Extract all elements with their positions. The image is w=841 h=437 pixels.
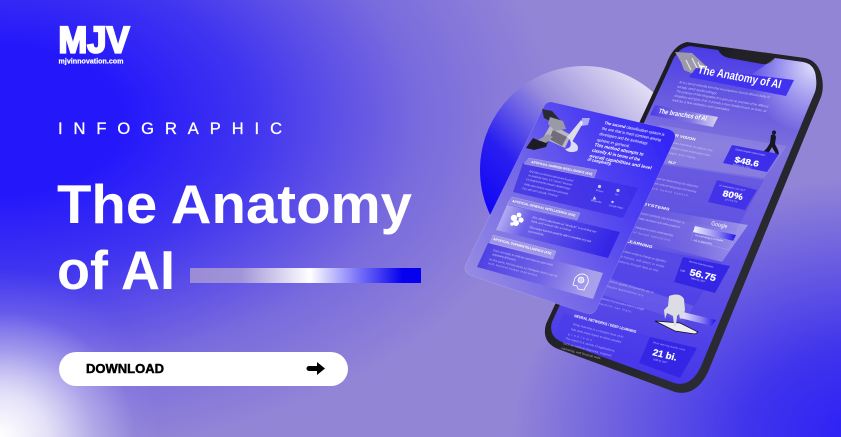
logo: MJV: mjvinnovation.com: [58, 58, 124, 66]
card background: [465, 102, 675, 314]
panel: artificial narrow intelligence: ANI refers to AI that is trained and focused: [529, 169, 574, 183]
section panel: deep learning: [582, 272, 694, 322]
card intro text: the one that is most common among: [601, 126, 663, 142]
heading: the branches of AI: The branches of AI: [657, 108, 708, 123]
panel: artificial narrow intelligence: on particular tasks, it is "narrow" because: [528, 173, 573, 187]
panel: artificial superintelligence: surpassing all humans.: [492, 252, 517, 262]
stat box: 80%: of companies use NLP: [719, 184, 746, 192]
card intro text: classify AI in terms of the: [591, 148, 642, 162]
stat box: 56.75: US$: [680, 269, 686, 273]
panel: artificial general intelligence: AGI, which is also known as "strong AI", is an AI that can: [532, 215, 597, 234]
panel: artificial superintelligence: Does not begin to replicate and improve upon itself,: [493, 248, 554, 267]
heading: The Anatomy of AI: of AI: [57, 239, 175, 301]
section panel: neural networks: Deep learning is a complex form of AI: [573, 322, 624, 339]
button: download: DOWNLOAD: [86, 362, 164, 376]
icons: ANI examples: Wikipedia: [591, 199, 602, 204]
glass card: [465, 102, 675, 314]
section panel: expert systems: of human specialists.: [633, 230, 672, 242]
card intro text: The second classification system is: [604, 120, 666, 137]
panel: artificial general intelligence: ARTIFICIAL GENERAL INTELLIGENCE (AGI): [512, 199, 576, 217]
google example card: ML in technology & in industries: [695, 233, 725, 243]
section panel: computer vision: images and videos.: [666, 150, 697, 160]
section panel: expert systems: expert systems use knowledge to: [640, 211, 685, 225]
heading: The Anatomy of AI: [57, 173, 412, 301]
stat box: 56.75: 56.75: [688, 267, 717, 283]
section panel: neural networks: that uses many layers to solve complex: [571, 327, 622, 344]
section panel: computer vision: interpret visual information from: [668, 145, 712, 157]
section panel: deep learning: computer applications in a: [603, 283, 644, 297]
stat box: 80%: [708, 180, 757, 210]
panel: artificial general intelligence: think and reason like a human: [531, 219, 572, 232]
panel: artificial superintelligence: ARTIFICIAL SUPERINTELLIGENCE (ASI): [493, 237, 552, 255]
panel: artificial superintelligence: with minimal human instruction.: [488, 261, 539, 278]
section panel: neural networks: marketing, and financial tools.: [561, 346, 602, 360]
logo: MJV: MJV: [58, 20, 130, 60]
heading: The Anatomy of AI: The Anatomy: [57, 173, 412, 235]
section panel: neural networks: NEURAL NETWORKS / DEEP LEARNING: [574, 313, 637, 334]
phone intro text: disciplines and types of AI, to provide a more detailed lesson on terms, as: [674, 94, 767, 113]
card intro text: overall capabilities and level: [589, 153, 653, 170]
phone intro text: [672, 80, 770, 113]
section panel: machine learning: to improve, with speed, or simple: [620, 254, 665, 269]
phone screen: [551, 46, 816, 384]
icons: ANI examples: Google Maps: [609, 204, 624, 210]
google example card: ML in diagnostics: [694, 238, 714, 246]
phone intro text: The purpose of this infographic is to give you an overview of the different: [676, 89, 769, 109]
section panel: deep learning: machines capable of beyond the use of: [605, 278, 654, 294]
icons: ANI examples: [591, 185, 624, 210]
section panel: deep learning: process of processes where a single: [600, 296, 645, 311]
section panel: natural language: NLP: [668, 160, 677, 165]
phone intro text: well as a few statistics and examples.: [672, 98, 731, 112]
stat box: 56.75: Machine learning market: [689, 260, 714, 269]
gradient bar: [190, 268, 421, 283]
stat box: $48.6: Global computer vision market: [735, 148, 766, 157]
card intro text: developers and the technology: [599, 131, 650, 146]
section panel: machine learning: LEARNING: [626, 239, 653, 249]
eyebrow: INFOGRAPHIC: INFOGRAPHIC: [58, 120, 282, 138]
panel: artificial narrow intelligence: ARTIFICIAL NARROW INTELLIGENCE (ANI): [531, 160, 593, 176]
panel: artificial superintelligence: At this point, ASI becomes so intelligent that it can do: [489, 257, 558, 278]
card intro text: [587, 120, 666, 170]
panel: artificial general intelligence: This means that AGI would be able to complete any task: [529, 225, 592, 243]
stat box: 21 bi: 21 bi.: [651, 347, 678, 363]
section panel: natural language: and human speech.: [651, 186, 690, 198]
section panel: natural language: with natural language processing: [653, 181, 697, 194]
stat box: 56.75: billion by 2027: [691, 277, 706, 283]
phone title: The Anatomy of AI: [696, 62, 783, 91]
panel: artificial general intelligence: successfully.: [528, 229, 545, 237]
section panel: neural networks: [554, 313, 700, 382]
section panel: natural language: used for determining the diagnosis: [655, 176, 700, 189]
section panel: machine learning: [586, 239, 722, 306]
phone mockup: [545, 42, 823, 393]
stat box: 80%: 80%: [721, 188, 745, 202]
section panel: computer vision: COMPUTER VISION: [652, 129, 696, 142]
panel: artificial narrow intelligence: they still can't actually "thinking": [522, 186, 559, 198]
decorative circle: [480, 66, 688, 274]
phone intro text: study and technology.: [677, 85, 718, 95]
icon: walking figure: [763, 130, 779, 154]
stat box: 21 bi: Deep learning market value: [653, 341, 686, 352]
section panel: computer vision: [640, 125, 787, 178]
card intro text: sphere in general.: [596, 137, 631, 149]
google example card: Google: [711, 221, 728, 231]
section panel: expert systems: designed to mimic understanding: [635, 225, 674, 237]
image: hand touching tablet: [655, 295, 716, 334]
section panel: machine learning: a faster model to change an algorithm: [622, 249, 668, 264]
stat box: $48.6: [723, 145, 779, 172]
icon: arrow: [306, 362, 325, 375]
image: hands on laptop: [526, 109, 590, 152]
section panel: deep learning: machine can learn.: [598, 301, 633, 314]
stat box: 56.75: [674, 257, 730, 293]
panel: artificial general intelligence: [496, 197, 620, 258]
card intro text: This method attempts to: [594, 142, 645, 157]
panel: artificial superintelligence: [477, 235, 603, 299]
icons: ANI examples: Siri: [615, 193, 619, 197]
section panel: machine learning: patterns through data so that: [618, 259, 659, 273]
section panel: expert systems: make decisions and solve problems: [638, 216, 682, 229]
button: download: [59, 352, 348, 386]
section panel: expert systems: [608, 202, 748, 262]
section panel: computer vision: allows machines to capture and: [670, 140, 713, 152]
heading: the branches of AI: [650, 105, 718, 127]
stat box: 21 bi: USD by 2027: [653, 358, 668, 364]
stat box: $48.6: $48.6: [733, 155, 761, 169]
icons: ANI examples: iPhone: [596, 189, 604, 194]
section panel: natural language: [612, 160, 764, 232]
phone intro text: AI is a broad umbrella term that encompasses several different fields of: [679, 80, 770, 99]
panel: artificial narrow intelligence: [513, 158, 638, 218]
phone body: [545, 42, 823, 393]
google example card: [691, 221, 736, 250]
section panel: neural networks: The result is a variety of applications,: [565, 336, 616, 353]
icon: head: [573, 274, 588, 290]
stat box: $48.6: billion by 2027: [733, 163, 752, 170]
panel: artificial narrow intelligence: it is programmed to execute a limited range: [526, 177, 571, 191]
panel: artificial narrow intelligence: While other devices respond to commands: [524, 182, 569, 196]
section panel: neural networks: problems.: [568, 332, 595, 343]
icon: brain: [510, 213, 524, 226]
stat box: 80%: globally: [725, 198, 738, 204]
section panel: neural networks: such as medical diagnosis, targeted: [563, 341, 612, 358]
card intro text: of complexity.: [587, 157, 613, 166]
section panel: expert systems: SYSTEMS: [643, 202, 671, 212]
stat box: 21 bi: [639, 337, 697, 378]
robot hand image: [675, 52, 708, 74]
